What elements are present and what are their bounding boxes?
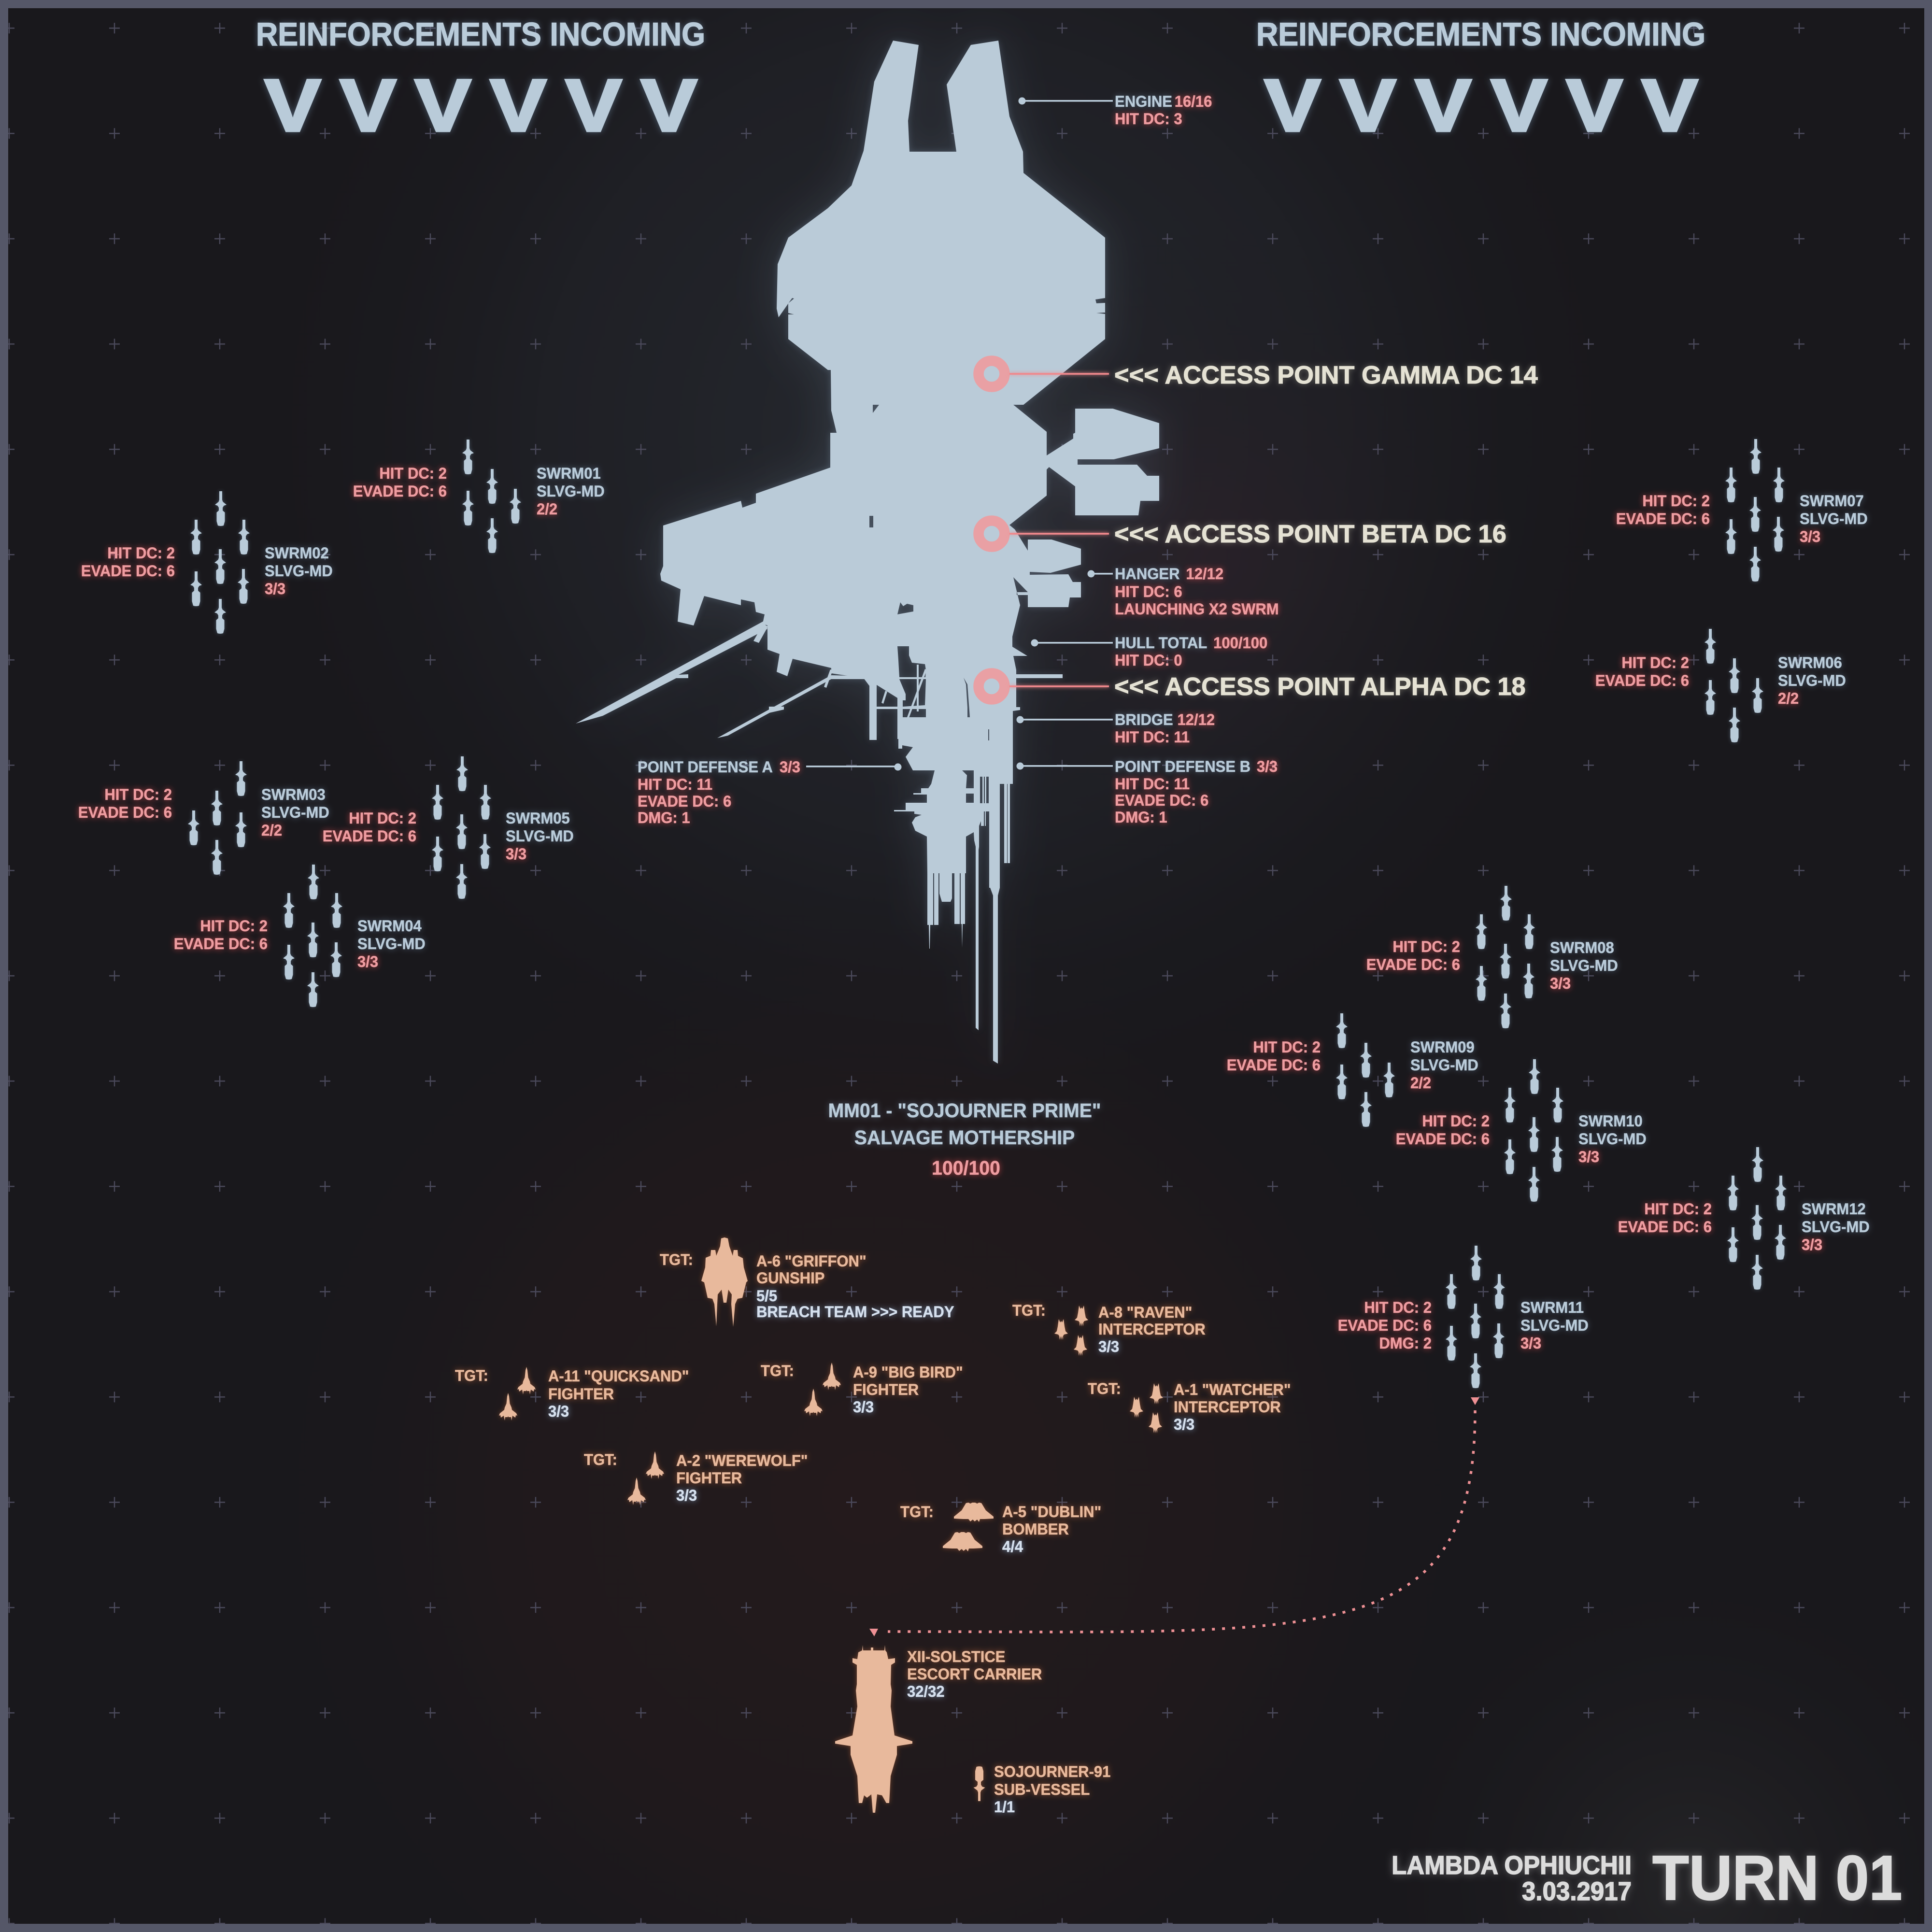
swarm SWRM11: DMG: 2 (1379, 1335, 1432, 1352)
unit A-5 dublin bomber (900, 1503, 1101, 1555)
swarm SWRM05: 3/3 (506, 845, 526, 863)
swarm SWRM12 (1618, 1147, 1870, 1290)
callout: point defense a (638, 758, 901, 826)
location and date: LAMBDA OPHIUCHII (1392, 1851, 1632, 1880)
swarm SWRM05: EVADE DC: 6 (323, 827, 416, 845)
mothership name: SALVAGE MOTHERSHIP (854, 1126, 1075, 1149)
unit A-9 big bird fighter: TGT: (761, 1362, 794, 1379)
unit A-8 raven interceptor: A-8 "RAVEN" (1098, 1304, 1192, 1321)
callout: hanger: LAUNCHING X2 SWRM (1115, 600, 1279, 618)
heading: reinforcements left: V (265, 64, 321, 147)
swarm SWRM02: 3/3 (265, 580, 285, 597)
unit A-1 watcher interceptor (1088, 1380, 1291, 1433)
swarm SWRM09: 2/2 (1410, 1074, 1431, 1092)
callout: point defense b: HIT DC: 11 (1115, 775, 1190, 793)
heading: reinforcements left (256, 16, 705, 147)
swarm SWRM09 (1227, 1013, 1478, 1127)
swarm SWRM11: 3/3 (1520, 1335, 1541, 1352)
swarm SWRM05: SWRM05 (506, 810, 570, 827)
unit A-8 raven interceptor (1012, 1302, 1206, 1356)
unit A-5 dublin bomber: A-5 "DUBLIN" (1002, 1503, 1101, 1520)
access point beta: <<< ACCESS POINT BETA DC 16 (1114, 520, 1506, 548)
unit A-5 dublin bomber: BOMBER (1002, 1520, 1069, 1538)
callout: hanger (1088, 565, 1279, 618)
unit A-11 quicksand fighter: TGT: (455, 1367, 488, 1384)
unit XII-Solstice escort carrier (835, 1645, 1042, 1813)
callout: engine: 16/16 (1175, 93, 1212, 110)
callout: point defense a: DMG: 1 (638, 809, 690, 826)
swarm SWRM08: HIT DC: 2 (1392, 938, 1460, 955)
callout: hull total: HIT DC: 0 (1115, 652, 1182, 669)
heading: reinforcements right: REINFORCEMENTS INCOMING (1256, 16, 1705, 53)
unit A-9 big bird fighter: A-9 "BIG BIRD" (853, 1364, 963, 1381)
swarm SWRM04: SLVG-MD (357, 935, 426, 952)
swarm SWRM12: HIT DC: 2 (1644, 1200, 1712, 1218)
swarm SWRM01: 2/2 (537, 500, 557, 518)
swarm SWRM04: EVADE DC: 6 (174, 935, 268, 952)
callout: point defense b (1016, 758, 1278, 826)
callout: hull total: 100/100 (1213, 634, 1267, 652)
callout: point defense b: DMG: 1 (1115, 809, 1167, 826)
swarm SWRM11 (1338, 1246, 1589, 1388)
unit A-2 werewolf fighter: FIGHTER (676, 1469, 742, 1487)
unit A-6 griffon gunship: 5/5 (756, 1287, 777, 1305)
unit A-2 werewolf fighter (584, 1451, 808, 1505)
heading: reinforcements right: V (1491, 64, 1547, 147)
swarm SWRM09: HIT DC: 2 (1253, 1038, 1321, 1056)
unit A-5 dublin bomber: TGT: (900, 1503, 934, 1520)
callout: point defense a: POINT DEFENSE A (638, 758, 773, 776)
swarm SWRM02: SWRM02 (265, 544, 329, 562)
callout: bridge: HIT DC: 11 (1115, 728, 1190, 746)
swarm SWRM09: SLVG-MD (1410, 1056, 1478, 1074)
swarm SWRM07 (1616, 439, 1868, 582)
unit A-6 griffon gunship: BREACH TEAM >>> READY (756, 1303, 954, 1321)
unit A-9 big bird fighter (761, 1362, 963, 1416)
swarm SWRM07: HIT DC: 2 (1642, 492, 1710, 510)
swarm SWRM01: HIT DC: 2 (379, 465, 447, 482)
swarm SWRM11: SWRM11 (1520, 1299, 1584, 1316)
swarm SWRM10 (1396, 1059, 1647, 1202)
unit A-9 big bird fighter: 3/3 (853, 1398, 874, 1416)
swarm SWRM08: SLVG-MD (1550, 957, 1618, 974)
swarm SWRM02: HIT DC: 2 (107, 544, 175, 562)
swarm SWRM12: SLVG-MD (1802, 1218, 1870, 1236)
unit A-6 griffon gunship: GUNSHIP (756, 1269, 824, 1287)
swarm SWRM11: EVADE DC: 6 (1338, 1317, 1432, 1334)
swarm SWRM09: EVADE DC: 6 (1227, 1056, 1321, 1074)
callout: point defense a: 3/3 (780, 758, 800, 776)
mothership silhouette (576, 41, 1159, 1064)
swarm SWRM08: 3/3 (1550, 975, 1571, 992)
heading: reinforcements right: V (1642, 64, 1698, 147)
swarm SWRM06: SWRM06 (1778, 654, 1842, 671)
swarm SWRM02: SLVG-MD (265, 562, 333, 580)
unit A-1 watcher interceptor: INTERCEPTOR (1174, 1398, 1281, 1416)
mothership name: 100/100 (932, 1157, 1000, 1179)
swarm SWRM04 (174, 865, 426, 1007)
swarm SWRM03: SLVG-MD (261, 804, 329, 821)
swarm SWRM10: 3/3 (1578, 1148, 1599, 1165)
swarm SWRM08 (1366, 886, 1618, 1028)
callout: hull total: HULL TOTAL (1115, 634, 1207, 652)
mothership name: MM01 - "SOJOURNER PRIME" (828, 1099, 1101, 1122)
callout: point defense a: EVADE DC: 6 (638, 793, 731, 810)
swarm SWRM04: 3/3 (357, 953, 378, 970)
access point alpha: <<< ACCESS POINT ALPHA DC 18 (1114, 673, 1526, 701)
heading: reinforcements left: V (641, 64, 697, 147)
heading: reinforcements right: V (1264, 64, 1321, 147)
swarm SWRM04: SWRM04 (357, 917, 422, 935)
swarm SWRM06: EVADE DC: 6 (1595, 672, 1689, 689)
swarm SWRM08: SWRM08 (1550, 939, 1614, 956)
swarm SWRM03: EVADE DC: 6 (78, 804, 172, 821)
unit A-6 griffon gunship (660, 1237, 954, 1327)
swarm SWRM07: 3/3 (1800, 528, 1820, 545)
callout: hanger: HANGER (1115, 565, 1180, 582)
heading: reinforcements left: V (490, 64, 546, 147)
swarm SWRM11: SLVG-MD (1520, 1317, 1589, 1334)
swarm SWRM03 (78, 761, 329, 875)
unit A-6 griffon gunship: A-6 "GRIFFON" (756, 1252, 867, 1270)
swarm SWRM06: SLVG-MD (1778, 672, 1846, 689)
unit A-2 werewolf fighter: 3/3 (676, 1487, 697, 1504)
callout: engine (1018, 93, 1212, 128)
heading: reinforcements left: REINFORCEMENTS INCOMING (256, 16, 705, 53)
unit Sojourner-91 sub-vessel: SUB-VESSEL (994, 1781, 1090, 1798)
swarm SWRM02: EVADE DC: 6 (81, 562, 175, 580)
callout: point defense a: HIT DC: 11 (638, 776, 712, 793)
callout: bridge: BRIDGE (1115, 711, 1173, 728)
swarm SWRM12: 3/3 (1802, 1236, 1822, 1253)
swarm SWRM11: HIT DC: 2 (1364, 1299, 1432, 1316)
swarm SWRM03: 2/2 (261, 822, 282, 839)
heading: reinforcements right: V (1340, 64, 1396, 147)
unit A-1 watcher interceptor: A-1 "WATCHER" (1174, 1381, 1291, 1398)
unit A-2 werewolf fighter: TGT: (584, 1451, 617, 1468)
unit A-1 watcher interceptor: 3/3 (1174, 1416, 1194, 1433)
arrow: dotted course from SWRM11 to carrier (869, 1397, 1479, 1636)
callout: point defense b: 3/3 (1257, 758, 1278, 775)
heading: reinforcements left: V (566, 64, 622, 147)
unit Sojourner-91 sub-vessel (974, 1763, 1110, 1816)
turn counter: TURN 01 (1652, 1843, 1902, 1914)
unit A-11 quicksand fighter (455, 1367, 689, 1421)
swarm SWRM10: HIT DC: 2 (1422, 1112, 1490, 1130)
unit A-8 raven interceptor: TGT: (1012, 1302, 1046, 1319)
swarm SWRM07: SLVG-MD (1800, 510, 1868, 527)
swarm SWRM06: HIT DC: 2 (1621, 654, 1689, 671)
swarm SWRM10: SWRM10 (1578, 1112, 1643, 1130)
swarm SWRM12: SWRM12 (1802, 1200, 1866, 1218)
callout: hanger: 12/12 (1186, 565, 1223, 582)
unit A-5 dublin bomber: 4/4 (1002, 1538, 1023, 1555)
heading: reinforcements right: V (1415, 64, 1471, 147)
callout: bridge (1016, 711, 1215, 746)
unit A-6 griffon gunship: TGT: (660, 1251, 693, 1268)
unit A-1 watcher interceptor: TGT: (1088, 1380, 1121, 1397)
mothership name (828, 1099, 1101, 1179)
callout: engine: HIT DC: 3 (1115, 110, 1182, 128)
heading: reinforcements left: V (415, 64, 471, 147)
swarm SWRM10: SLVG-MD (1578, 1130, 1647, 1148)
swarm SWRM03: HIT DC: 2 (104, 786, 172, 803)
swarm SWRM05: HIT DC: 2 (349, 810, 416, 827)
unit XII-Solstice escort carrier: 32/32 (907, 1683, 945, 1700)
swarm SWRM04: HIT DC: 2 (200, 917, 268, 935)
heading: reinforcements right (1256, 16, 1705, 147)
swarm SWRM08: EVADE DC: 6 (1366, 956, 1460, 973)
heading: reinforcements right: V (1566, 64, 1622, 147)
unit A-8 raven interceptor: 3/3 (1098, 1338, 1119, 1355)
callout: hanger: HIT DC: 6 (1115, 583, 1182, 600)
location and date (1392, 1851, 1632, 1906)
swarm SWRM05: SLVG-MD (506, 827, 574, 845)
unit A-2 werewolf fighter: A-2 "WEREWOLF" (676, 1452, 808, 1469)
callout: point defense b: POINT DEFENSE B (1115, 758, 1250, 775)
swarm SWRM07: SWRM07 (1800, 492, 1864, 510)
swarm SWRM12: EVADE DC: 6 (1618, 1218, 1712, 1236)
access point gamma: <<< ACCESS POINT GAMMA DC 14 (1114, 361, 1538, 389)
unit A-11 quicksand fighter: FIGHTER (548, 1385, 614, 1403)
swarm SWRM01: SLVG-MD (537, 483, 605, 500)
unit A-11 quicksand fighter: 3/3 (548, 1403, 569, 1420)
swarm SWRM07: EVADE DC: 6 (1616, 510, 1710, 527)
heading: reinforcements left: V (340, 64, 396, 147)
swarm SWRM05 (323, 756, 574, 899)
unit A-8 raven interceptor: INTERCEPTOR (1098, 1321, 1206, 1338)
swarm SWRM03: SWRM03 (261, 786, 326, 803)
swarm SWRM01 (353, 440, 605, 553)
swarm SWRM10: EVADE DC: 6 (1396, 1130, 1490, 1148)
swarm SWRM01: EVADE DC: 6 (353, 483, 447, 500)
callout: point defense b: EVADE DC: 6 (1115, 792, 1208, 809)
swarm SWRM06 (1595, 629, 1846, 742)
swarm SWRM09: SWRM09 (1410, 1038, 1475, 1056)
unit Sojourner-91 sub-vessel: 1/1 (994, 1798, 1015, 1816)
callout: engine: ENGINE (1115, 93, 1172, 110)
swarm SWRM01: SWRM01 (537, 465, 601, 482)
swarm SWRM02 (81, 491, 333, 634)
unit A-9 big bird fighter: FIGHTER (853, 1381, 919, 1398)
swarm SWRM06: 2/2 (1778, 690, 1799, 707)
unit XII-Solstice escort carrier: XII-SOLSTICE (907, 1648, 1005, 1665)
unit XII-Solstice escort carrier: ESCORT CARRIER (907, 1665, 1042, 1683)
unit Sojourner-91 sub-vessel: SOJOURNER-91 (994, 1763, 1110, 1780)
callout: bridge: 12/12 (1177, 711, 1215, 728)
callout: hull total (1031, 634, 1267, 669)
location and date: 3.03.2917 (1522, 1877, 1632, 1906)
unit A-11 quicksand fighter: A-11 "QUICKSAND" (548, 1367, 689, 1385)
